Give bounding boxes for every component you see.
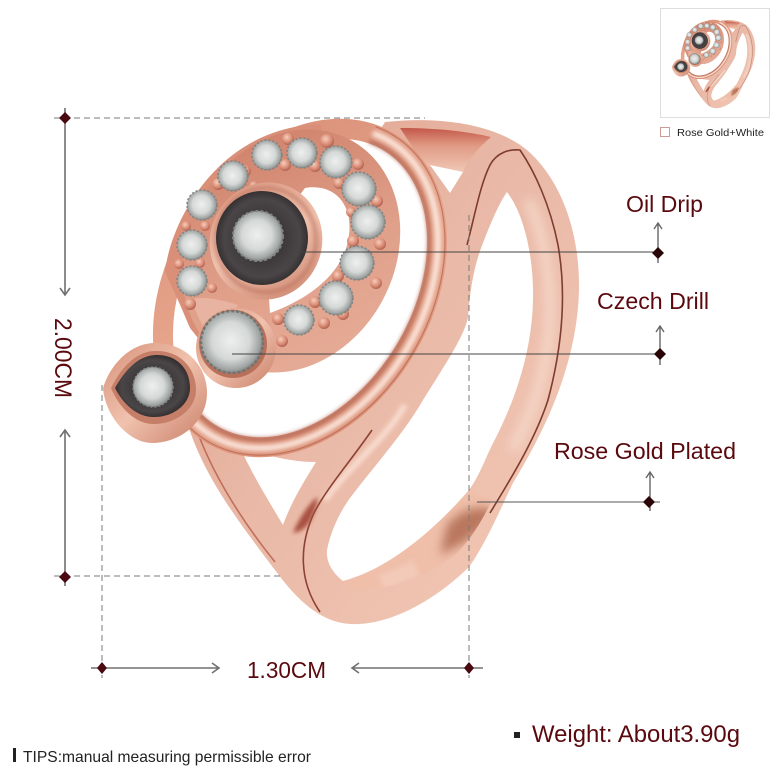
callout: rose gold plated: Rose Gold Plated xyxy=(554,438,736,464)
colour option swatch xyxy=(660,128,670,136)
callout: oil drip xyxy=(288,191,703,263)
callout: czech drill xyxy=(232,288,709,365)
main ring illustration xyxy=(96,67,579,624)
callout: oil drip: Oil Drip xyxy=(626,191,703,217)
measurement dashed guides xyxy=(54,118,469,678)
weight note: Weight: About3.90g xyxy=(532,721,740,748)
tips note: TIPS:manual measuring permissible error xyxy=(23,749,312,766)
height dimension arrows xyxy=(60,108,70,586)
height label: 2.00CM xyxy=(49,318,76,398)
thumbnail ring xyxy=(671,11,755,108)
width label: 1.30CM xyxy=(247,657,326,683)
thumbnail frame xyxy=(660,8,770,118)
width dimension arrows xyxy=(91,663,483,673)
colour option label: Rose Gold+White xyxy=(677,127,764,139)
callout: czech drill: Czech Drill xyxy=(597,288,709,314)
corner diamond markers xyxy=(59,112,474,674)
callout: rose gold plated xyxy=(477,438,736,511)
